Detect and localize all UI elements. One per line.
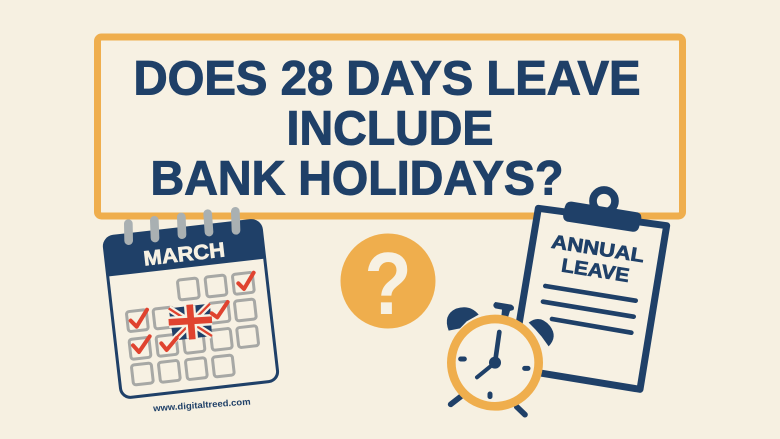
check marks: [131, 273, 254, 352]
icon: clipboard: [512, 190, 667, 389]
icon: question mark badge: ?: [364, 234, 412, 333]
clock hands: [461, 332, 528, 397]
clipboard label: LEAVE: [560, 256, 631, 287]
clipboard lines: [543, 286, 636, 333]
title box: [98, 37, 682, 216]
clipboard label: ANNUAL: [550, 232, 646, 267]
clock bells: [447, 302, 554, 346]
UK flag: [169, 304, 212, 341]
month label: MARCH: [142, 238, 226, 271]
icon: question mark badge: [340, 234, 436, 333]
website URL: www.digitaltreed.com: [152, 397, 251, 413]
date grid: [126, 272, 259, 385]
title text: INCLUDE: [286, 102, 494, 156]
title text: [134, 52, 640, 206]
icon: calendar: [103, 211, 279, 413]
icon: alarm clock: [447, 302, 554, 415]
calendar rings: [128, 211, 236, 241]
clock feet: [451, 397, 525, 415]
clock body: [451, 319, 539, 406]
title text: BANK HOLIDAYS?: [150, 152, 564, 206]
clipboard clip: [564, 190, 640, 231]
clock hub: [489, 357, 501, 369]
calendar page: [103, 220, 279, 398]
clipboard board: [512, 208, 667, 389]
clipboard label: [550, 232, 646, 287]
title text: DOES 28 DAYS LEAVE: [134, 52, 640, 106]
